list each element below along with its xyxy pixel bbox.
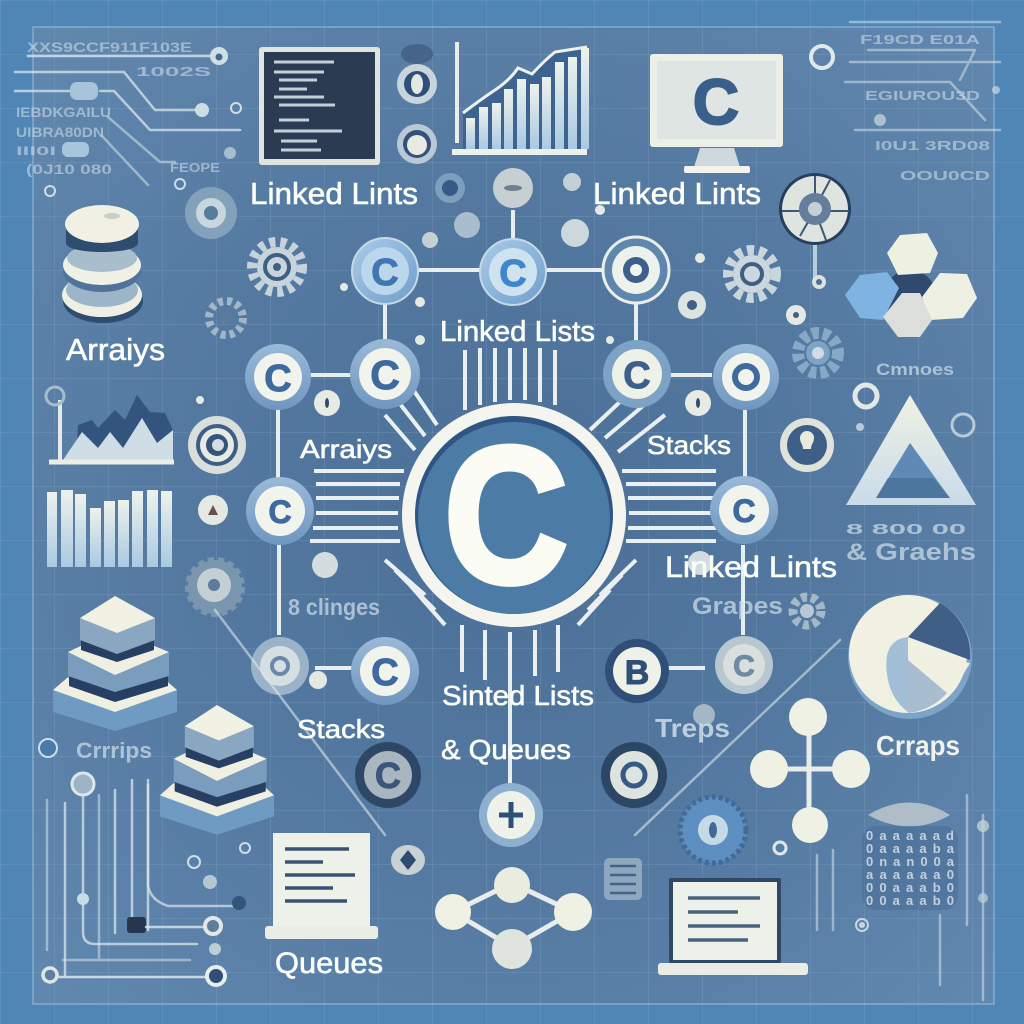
icon: document laptop left bbox=[265, 833, 378, 939]
label: Stacks right: Stacks bbox=[647, 430, 731, 460]
icon: gear right small bbox=[798, 333, 838, 373]
circuit traces: top left: III0I bbox=[16, 144, 56, 158]
node: C top left: C bbox=[371, 252, 399, 294]
node: O right outer bbox=[713, 344, 779, 410]
icon: top right ring chart bbox=[779, 173, 851, 289]
circuit traces: bottom left bbox=[39, 739, 250, 985]
label: Arraiys left: Arraiys bbox=[66, 332, 165, 367]
label: Linked Lists center: Linked Lists bbox=[440, 316, 595, 348]
node: C bottom left inner: C bbox=[371, 652, 399, 694]
node: C left inner: C bbox=[370, 352, 400, 398]
label: Crrrips left: Crrrips bbox=[76, 738, 152, 763]
bar chart with trend line bbox=[452, 42, 589, 152]
label: Stacks lower: Stacks bbox=[297, 714, 385, 744]
label: Queues center: & Queues bbox=[441, 734, 571, 765]
node: C left inner bbox=[350, 339, 420, 409]
icon: small C badge top bbox=[397, 44, 437, 104]
icon: tree graph bbox=[750, 698, 870, 843]
central hub: C logo bbox=[402, 403, 626, 627]
icon: glyph sphere: 0 0 a a a b 0 bbox=[866, 893, 954, 908]
node: C left outer bbox=[245, 344, 311, 410]
circuit traces: top left: UIBRA80DN bbox=[16, 124, 104, 140]
icon: gauge ring left bbox=[188, 416, 246, 474]
icon: gear bbox=[252, 242, 302, 292]
label: Cringes: 8 clinges bbox=[288, 594, 380, 620]
icon: glyph sphere: a a a a a a 0 bbox=[866, 867, 954, 882]
icon: area chart bbox=[46, 387, 174, 462]
label: Queues bottom: Queues bbox=[275, 947, 383, 980]
circuit traces: bottom right bbox=[774, 795, 989, 1000]
icon: glyph sphere: 0 a a a a a d bbox=[866, 828, 954, 843]
icon: laptop right bbox=[658, 878, 808, 975]
connector lines between nodes bbox=[278, 210, 745, 785]
node: C right inner bbox=[603, 340, 671, 408]
icon: C ring bottom left: C bbox=[375, 755, 401, 796]
headings: top row labels bbox=[250, 176, 761, 211]
icon: chip bbox=[604, 858, 642, 900]
icon: small rings right bbox=[855, 385, 974, 436]
label: Grapes: Grapes bbox=[692, 593, 783, 620]
label: Graphs faded bbox=[846, 521, 976, 566]
icon: gear right bbox=[728, 250, 776, 298]
icon: blue gear disk bbox=[680, 797, 746, 863]
label: Arraiys center: Arraiys bbox=[300, 434, 392, 464]
icon: layered stack top bbox=[53, 596, 177, 731]
node: bottom right inner bbox=[605, 639, 669, 703]
circuit traces: top right: EGIUROU3D bbox=[865, 88, 980, 103]
node: C mid left: C bbox=[268, 494, 292, 530]
node: C right inner: C bbox=[623, 355, 651, 397]
circuit traces: top right bbox=[811, 22, 1000, 183]
label: Sinted Lists: Sinted Lists bbox=[442, 680, 594, 711]
label: Cmnoes: Cmnoes bbox=[876, 360, 954, 379]
node: bottom left outer bbox=[251, 637, 309, 695]
icon: network graph bottom bbox=[435, 867, 592, 969]
icon: glyph sphere bbox=[862, 802, 958, 910]
headings: top row labels: Linked Lints bbox=[593, 176, 761, 211]
central hub: C logo: C bbox=[444, 407, 568, 624]
icon: hexagon cluster bbox=[845, 233, 977, 337]
node: gear top right bbox=[603, 237, 669, 303]
node: C top center: C bbox=[499, 253, 527, 295]
label: Crraps right: Crraps bbox=[876, 730, 960, 761]
label: Graphs faded: 8 800 00 bbox=[846, 521, 966, 538]
label: Treps: Treps bbox=[655, 713, 730, 743]
headings: top row labels: Linked Lints bbox=[250, 176, 418, 211]
icon: gear near Grapes bbox=[793, 597, 821, 625]
icon: C ring bottom left bbox=[355, 742, 421, 808]
node: bottom right inner: B bbox=[625, 654, 649, 692]
icon: monitor with C: C bbox=[693, 66, 739, 138]
circuit traces: top right: I0U1 3RD08 bbox=[875, 138, 990, 153]
node: C left outer: C bbox=[264, 358, 292, 400]
node: C bottom left inner bbox=[351, 637, 419, 705]
circuit traces: top left: XXS9CCF911F103E bbox=[27, 39, 192, 55]
icon: pie chart bbox=[848, 595, 972, 719]
icon: layered stack lower bbox=[160, 705, 274, 835]
node: C mid right: C bbox=[732, 493, 756, 529]
circuit traces: top left: (0J10 080 bbox=[26, 161, 112, 177]
node: small bead near left bbox=[314, 390, 340, 416]
node: C mid left bbox=[246, 477, 314, 545]
icon: small ring bbox=[185, 187, 237, 239]
node: C top left bbox=[352, 238, 418, 304]
node: C bottom right outer: C bbox=[733, 650, 755, 683]
icon: glyph sphere: 0 a a a a b a bbox=[866, 841, 955, 856]
icon: code terminal bbox=[259, 47, 380, 165]
icon: gear disk left bbox=[188, 560, 242, 614]
node: C bottom right outer bbox=[715, 636, 773, 694]
icon: pin badge bbox=[391, 845, 425, 875]
node: C mid right bbox=[710, 476, 778, 544]
small beads scattered bbox=[196, 168, 806, 726]
diagonal lines bottom bbox=[215, 610, 840, 835]
node: small bead near right bbox=[685, 390, 711, 416]
circuit traces: top left: IEBDKGAILU bbox=[16, 104, 111, 120]
icon: vertical bars bbox=[47, 490, 172, 567]
icon: gear small bbox=[209, 301, 243, 335]
icon: glyph sphere: 0 0 a a a b 0 bbox=[866, 880, 954, 895]
label: Graphs faded: & Graehs bbox=[846, 539, 976, 566]
circuit traces: top left bbox=[15, 39, 241, 196]
circuit traces: top left: 1002S bbox=[136, 64, 212, 79]
node: C top center bbox=[480, 239, 546, 305]
radial lines around central hub bbox=[310, 348, 716, 680]
icon: ring badge bottom bbox=[601, 742, 667, 808]
circuit traces: top right: F19CD E01A bbox=[860, 32, 981, 47]
icon: triangle bbox=[846, 395, 976, 505]
label: Linked Lints right: Linked Lints bbox=[665, 551, 837, 584]
icon: glyph sphere: 0 n a n 0 0 a bbox=[866, 854, 955, 869]
node: plus bottom center bbox=[479, 783, 543, 847]
icon: disc stack bbox=[62, 205, 143, 323]
icon: monitor with C bbox=[650, 54, 783, 173]
circuit traces: top right: OOU0CD bbox=[900, 168, 990, 183]
circuit traces: top left: FEOPE bbox=[170, 160, 220, 175]
icon: small C badge 2 bbox=[397, 124, 437, 164]
icon: light bulb badge bbox=[780, 418, 834, 472]
